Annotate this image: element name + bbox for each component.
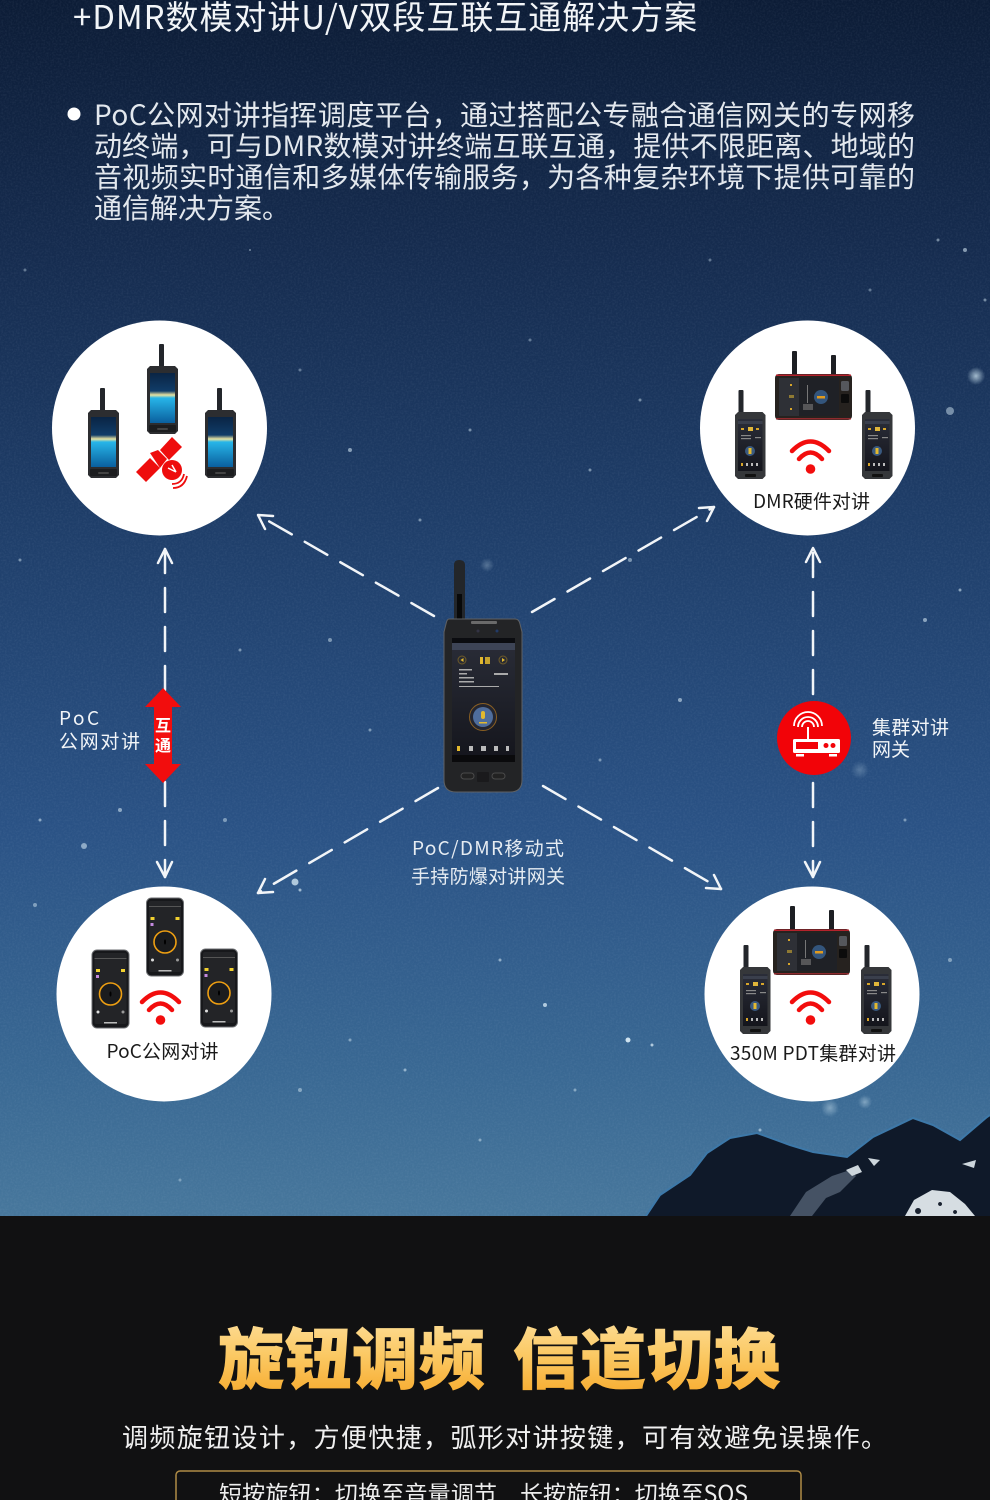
circle: DMR hardware intercom: DMR硬件对讲: [753, 487, 870, 514]
circle: 350M PDT trunking intercom: [704, 886, 920, 1102]
circle: satellite terminals: [52, 320, 267, 536]
circle: PoC public network intercom: PoC公网对讲: [106, 1037, 218, 1064]
label: PoC public network: PoC: [59, 704, 102, 731]
circle: 350M PDT trunking intercom: 350M PDT集群对讲: [730, 1039, 896, 1066]
red double arrow: interconnect: 互: [155, 712, 171, 736]
description paragraph: 通信解决方案。: [94, 187, 290, 227]
heading: knob tuning, channel switching: 旋钮调频: [218, 1307, 485, 1403]
icon: satellite: [136, 437, 187, 488]
circle: PoC public network intercom: [56, 886, 272, 1102]
heading: knob tuning, channel switching: 信道切换: [513, 1307, 780, 1403]
circle: DMR hardware intercom: [700, 320, 915, 536]
subheading: 调频旋钮设计，方便快捷，弧形对讲按键，可有效避免误操作。: [122, 1418, 887, 1455]
callout box: [176, 1471, 801, 1500]
label: central handset: [411, 834, 565, 889]
black lower section: [0, 1216, 990, 1500]
stars: [18, 238, 986, 1182]
description paragraph: PoC公网对讲指挥调度平台，通过搭配公专融合通信网关的专网移: [94, 94, 915, 134]
heading: knob tuning, channel switching: [218, 1307, 780, 1403]
central gateway handset: [444, 560, 522, 792]
description paragraph: 动终端，可与DMR数模对讲终端互联互通，提供不限距离、地域的: [94, 125, 915, 165]
description paragraph: [68, 94, 915, 227]
red double arrow: interconnect: 通: [155, 732, 171, 756]
red double arrow: interconnect: [145, 688, 181, 783]
icon: trunking gateway router: [777, 701, 851, 775]
label: central handset: PoC/DMR移动式: [412, 834, 564, 861]
description paragraph: 音视频实时通信和多媒体传输服务，为各种复杂环境下提供可靠的: [94, 156, 915, 196]
label: trunking gateway: 网关: [872, 735, 910, 762]
dashed connection arrows: [157, 507, 820, 893]
label: PoC public network: [59, 704, 140, 754]
label: trunking gateway: [872, 713, 949, 762]
label: PoC public network: 公网对讲: [59, 727, 140, 754]
label: trunking gateway: 集群对讲: [872, 713, 949, 740]
label: central handset: 手持防爆对讲网关: [411, 862, 565, 889]
mountain silhouette: [646, 1115, 990, 1216]
